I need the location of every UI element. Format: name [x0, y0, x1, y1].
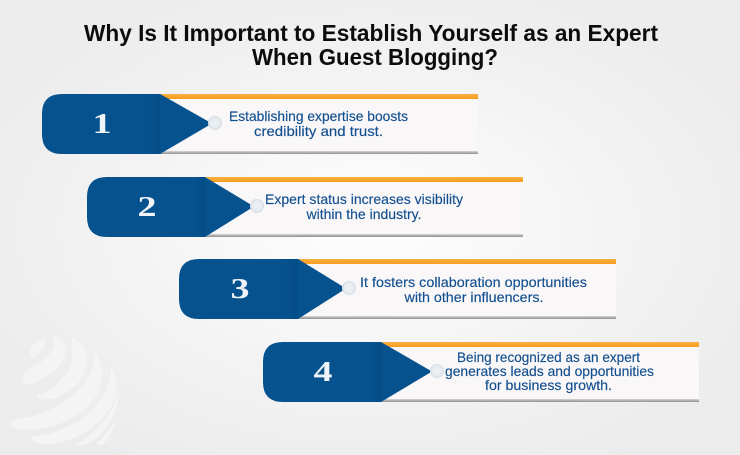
- text card 1: [160, 94, 478, 154]
- blue arrow tab 2: [87, 177, 254, 237]
- text card 4: [381, 342, 699, 402]
- text 1: credibility and trust.: [254, 123, 383, 139]
- text 3: with other influencers.: [403, 289, 544, 305]
- text 1: [229, 108, 408, 139]
- title: [84, 20, 658, 70]
- text 3: It fosters collaboration opportunities: [360, 274, 587, 290]
- connector dot 3: [342, 281, 356, 295]
- blue arrow tab 4: [263, 342, 432, 402]
- panel: item 2: [87, 177, 523, 237]
- panel: item 1: [42, 94, 478, 154]
- number 4: 4: [314, 356, 332, 388]
- text card 2: [205, 177, 523, 237]
- blue arrow tab 1: [42, 94, 212, 154]
- number 3: 3: [230, 273, 250, 305]
- number 2: 2: [138, 191, 156, 223]
- text 2: within the industry.: [305, 206, 422, 222]
- text 2: Expert status increases visibility: [265, 191, 463, 207]
- connector dot 4: [430, 364, 444, 378]
- panel: item 4: [263, 342, 699, 402]
- blue arrow tab 3: [179, 259, 346, 319]
- panel: item 3: [179, 259, 616, 319]
- text card 3: [298, 259, 616, 319]
- text 4: Being recognized as an expert: [457, 349, 640, 365]
- text 3: [360, 274, 587, 305]
- text 1: Establishing expertise boosts: [229, 108, 408, 124]
- text 2: [265, 191, 463, 222]
- icon: faded globe watermark: [10, 334, 119, 446]
- title: When Guest Blogging?: [252, 44, 498, 70]
- connector dot 1: [208, 116, 222, 130]
- text 4: for business growth.: [485, 377, 612, 393]
- connector dot 2: [250, 199, 264, 213]
- text 4: [445, 349, 654, 393]
- text 4: generates leads and opportunities: [445, 363, 654, 379]
- number 1: 1: [92, 108, 112, 140]
- title: Why Is It Important to Establish Yourself as an Expert: [84, 20, 658, 46]
